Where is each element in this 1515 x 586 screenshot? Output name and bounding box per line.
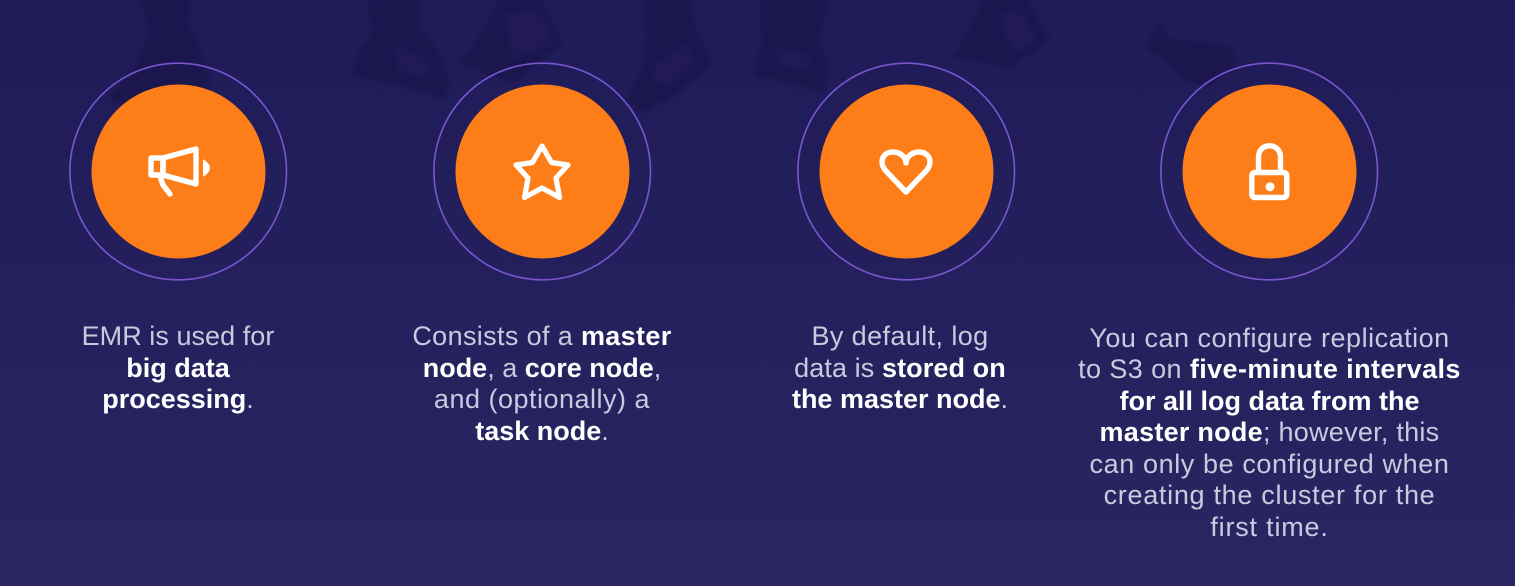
- orange disc: [1182, 84, 1356, 258]
- orange disc: [92, 84, 266, 258]
- orange disc: [456, 84, 630, 258]
- icon: heart: [882, 152, 930, 192]
- text: replication: You can configure replication: [1089, 322, 1450, 352]
- text: log storage: the master node.: [792, 384, 1008, 414]
- text: replication: first time.: [1210, 512, 1329, 542]
- outer ring: [434, 63, 650, 280]
- column 3: heart: [797, 62, 1016, 281]
- column 4: padlock: [1160, 62, 1378, 281]
- text: node types: [412, 321, 672, 446]
- icon: megaphone: [151, 149, 210, 194]
- text: log storage: By default, log: [811, 321, 989, 351]
- text: log storage: data is stored on: [794, 353, 1006, 383]
- column 2: star: [433, 62, 652, 281]
- column 1: megaphone: [69, 62, 288, 281]
- text: replication: to S3 on five-minute intervals: [1078, 354, 1461, 384]
- text: replication: creating the cluster for the: [1104, 480, 1435, 510]
- text: node types: task node.: [475, 416, 609, 446]
- text: EMR use: EMR is used for: [82, 321, 274, 351]
- icon: padlock: [1252, 146, 1287, 198]
- text: EMR use: big data: [126, 353, 230, 383]
- text: EMR use: [82, 321, 274, 414]
- text: replication: can only be configured when: [1090, 449, 1449, 479]
- text: node types: node, a core node,: [423, 353, 661, 383]
- outer ring: [1161, 63, 1378, 280]
- text: replication: for all log data from the: [1119, 386, 1420, 416]
- icon: star: [516, 146, 568, 198]
- text: log storage: [792, 321, 1008, 414]
- orange disc: [820, 84, 994, 258]
- outer ring: [70, 63, 286, 280]
- text: node types: Consists of a master: [412, 321, 672, 351]
- text: EMR use: processing.: [102, 384, 254, 414]
- outer ring: [798, 63, 1014, 280]
- text: node types: and (optionally) a: [434, 384, 650, 414]
- text: replication: [1078, 322, 1461, 542]
- text: replication: master node; however, this: [1100, 417, 1439, 447]
